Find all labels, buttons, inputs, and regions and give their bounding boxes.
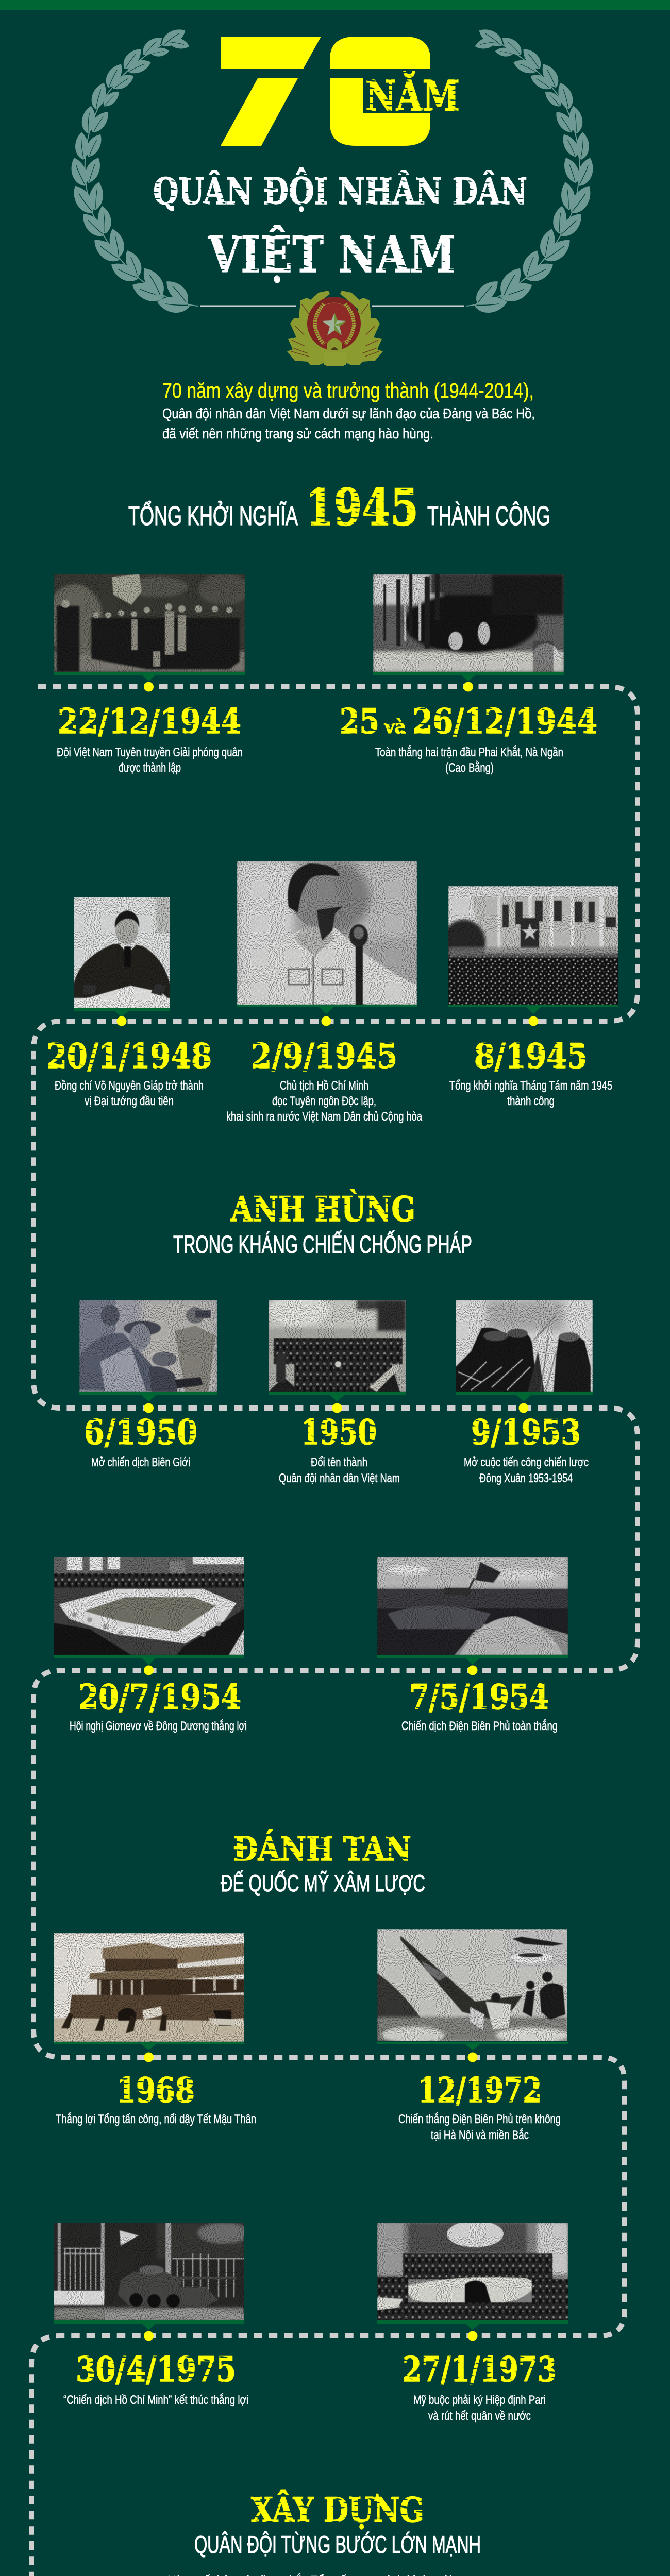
description: “Chiến dịch Hồ Chí Minh” kết thúc thắng lợi — [63, 2393, 248, 2407]
date: 20/7/1954 — [78, 1677, 241, 1717]
description line 2: và rút hết quân về nước — [428, 2409, 531, 2423]
section heading: Tổng khởi nghĩa 1945 — [128, 478, 550, 537]
date: 25 — [340, 701, 379, 741]
section heading: Đánh tan: ĐÁNH TAN — [233, 1829, 411, 1869]
pointer: 9/1953 — [456, 1392, 593, 1413]
word NĂM: NĂM — [365, 71, 460, 121]
event: 22/12/1944 — [57, 701, 243, 775]
description: Chiến dịch Điện Biên Phủ toàn thắng — [401, 1719, 558, 1733]
photo: tank at Independence Palace gate — [54, 2223, 244, 2320]
pointer: 2/9/1945 — [237, 1005, 417, 1026]
numeral 0 — [330, 37, 430, 146]
description: Chiến thắng Điện Biên Phủ trên không — [398, 2112, 561, 2126]
section heading: Tổng khởi nghĩa 1945: 1945 — [306, 478, 418, 537]
date: 9/1953 — [471, 1412, 581, 1452]
date: 12/1972 — [418, 2070, 542, 2110]
pointer: 27/1/1973 — [377, 2320, 568, 2341]
date: và — [384, 716, 406, 738]
description: Mở cuộc tiến công chiến lược — [464, 1455, 589, 1469]
pointer: 1968 — [54, 2042, 244, 2062]
section heading: Xây dựng: QUÂN ĐỘI TỪNG BƯỚC LỚN MẠNH — [194, 2531, 481, 2558]
pointer: 25 và 26/12/1944 — [373, 672, 564, 691]
icon: laurel wreath right — [466, 24, 597, 314]
date: 22/12/1944 — [58, 701, 241, 741]
title number 70 — [221, 37, 460, 146]
photo: Border campaign — [79, 1300, 217, 1392]
date: 30/4/1975 — [76, 2349, 236, 2389]
photo: Geneva conference — [54, 1557, 244, 1655]
description line 2: Đông Xuân 1953-1954 — [479, 1471, 573, 1485]
section heading: Xây dựng: XÂY DỰNG — [251, 2490, 424, 2530]
photo: founding of propaganda unit — [54, 574, 245, 672]
event: 7/5/1954 — [401, 1677, 558, 1733]
event: 2/9/1945 — [226, 1036, 422, 1124]
pointer: 12/1972 — [377, 2042, 568, 2062]
description line 2: vị Đại tướng đầu tiên — [85, 1094, 174, 1108]
top band — [0, 0, 670, 10]
date: 6/1950 — [84, 1412, 197, 1452]
photo: SAM missile December 1972 — [377, 1929, 567, 2041]
date: 8/1945 — [474, 1036, 588, 1076]
event: 30/4/1975 — [63, 2349, 248, 2407]
section heading: Đánh tan: ĐẾ QUỐC MỸ XÂM LƯỢC — [221, 1870, 425, 1896]
photo: Paris agreement hall — [377, 2223, 568, 2320]
description line 2: (Cao Bằng) — [445, 761, 494, 775]
description: Chủ tịch Hồ Chí Minh — [280, 1079, 368, 1093]
photo: Hồ Chí Minh reading declaration — [237, 861, 417, 1005]
heading: Quân đội nhân dân: QUÂN ĐỘI NHÂN DÂN — [153, 168, 527, 213]
description: Tổng khởi nghĩa Tháng Tám năm 1945 — [449, 1079, 612, 1093]
event: 20/7/1954 — [70, 1677, 247, 1733]
date: 1968 — [116, 2070, 195, 2110]
date — [340, 701, 597, 741]
event: 8/1945 — [449, 1036, 612, 1108]
section heading: Anh hùng — [173, 1189, 472, 1259]
event: 20/1/1948 — [46, 1036, 212, 1108]
pointer: 20/1/1948 — [74, 1008, 170, 1026]
event: 9/1953 — [464, 1412, 589, 1485]
photo: Huế citadel 1968 — [54, 1933, 244, 2042]
description line 2: tại Hà Nội và miền Bắc — [431, 2128, 529, 2142]
description line 2: được thành lập — [119, 761, 181, 775]
photo: August revolution crowd at Opera House — [448, 886, 618, 1005]
date: 20/1/1948 — [46, 1036, 212, 1076]
pointer: 1950 — [269, 1392, 406, 1413]
photo: soldiers in Đông Xuân offensive — [456, 1300, 593, 1392]
icon: laurel wreath left — [67, 24, 198, 314]
photo: Điện Biên Phủ victory flag — [377, 1557, 568, 1655]
intro line 2: Quân đội nhân dân Việt Nam dưới sự lãnh đạo của Đảng và Bác Hồ, — [162, 405, 535, 421]
description: Hội nghị Giơnevơ về Đông Dương thắng lợi — [70, 1719, 247, 1733]
section heading: Anh hùng: ANH HÙNG — [230, 1189, 415, 1229]
date: 7/5/1954 — [409, 1677, 549, 1717]
pointer: 6/1950 — [79, 1392, 217, 1413]
description: Đội Việt Nam Tuyên truyền Giải phóng quân — [57, 745, 243, 759]
description line 2: Quân đội nhân dân Việt Nam — [279, 1471, 400, 1485]
event: 25 và 26/12/1944 — [340, 701, 597, 775]
description: Đổi tên thành — [311, 1455, 367, 1469]
event: 12/1972 — [398, 2070, 561, 2142]
section heading: Đánh tan — [221, 1829, 425, 1896]
event: 1968 — [56, 2070, 256, 2126]
date: 2/9/1945 — [251, 1036, 397, 1076]
description line 2: đọc Tuyên ngôn Độc lập, — [272, 1094, 376, 1108]
pointer: 22/12/1944 — [54, 672, 245, 691]
description: Đồng chí Võ Nguyên Giáp trở thành — [55, 1079, 204, 1093]
description line 3: khai sinh ra nước Việt Nam Dân chủ Cộng hòa — [226, 1110, 422, 1124]
icon: army emblem — [287, 291, 383, 366]
heading: Việt Nam: VIỆT NAM — [208, 225, 456, 284]
photo: renaming ceremony — [269, 1300, 406, 1392]
timeline dashed path — [31, 687, 660, 2576]
numeral 7 — [221, 37, 321, 146]
date: 26/12/1944 — [412, 701, 597, 741]
description line 2: thành công — [507, 1094, 555, 1108]
section heading: Anh hùng: TRONG KHÁNG CHIẾN CHỐNG PHÁP — [173, 1230, 472, 1259]
date: 1950 — [301, 1412, 377, 1452]
pointer: 20/7/1954 — [54, 1655, 244, 1675]
description: Mỹ buộc phải ký Hiệp định Pari — [413, 2393, 546, 2407]
event: 27/1/1973 — [403, 2349, 557, 2423]
photo: Võ Nguyên Giáp — [74, 897, 170, 1008]
description: Toàn thắng hai trận đầu Phai Khắt, Nà Ngần — [375, 745, 563, 759]
pointer: 30/4/1975 — [54, 2320, 244, 2341]
intro text block — [162, 379, 535, 442]
intro headline: 70 năm xây dựng và trưởng thành (1944-2014), — [162, 379, 534, 402]
pointer: 7/5/1954 — [377, 1655, 568, 1675]
date: 27/1/1973 — [403, 2349, 557, 2389]
photo: first two battles — [373, 574, 564, 672]
divider lines beside emblem — [200, 305, 464, 307]
description: Mở chiến dịch Biên Giới — [91, 1455, 190, 1469]
intro line 3: đã viết nên những trang sử cách mạng hào hùng. — [162, 426, 433, 442]
event: 6/1950 — [84, 1412, 197, 1469]
event: 1950 — [279, 1412, 400, 1485]
section heading: Tổng khởi nghĩa 1945: THÀNH CÔNG — [427, 501, 550, 531]
section heading: Xây dựng — [194, 2490, 481, 2558]
description: Thắng lợi Tổng tấn công, nổi dậy Tết Mậu Thân — [56, 2112, 256, 2126]
section heading: Tổng khởi nghĩa 1945: TỔNG KHỞI NGHĨA — [128, 501, 298, 531]
pointer: 8/1945 — [448, 1005, 618, 1026]
